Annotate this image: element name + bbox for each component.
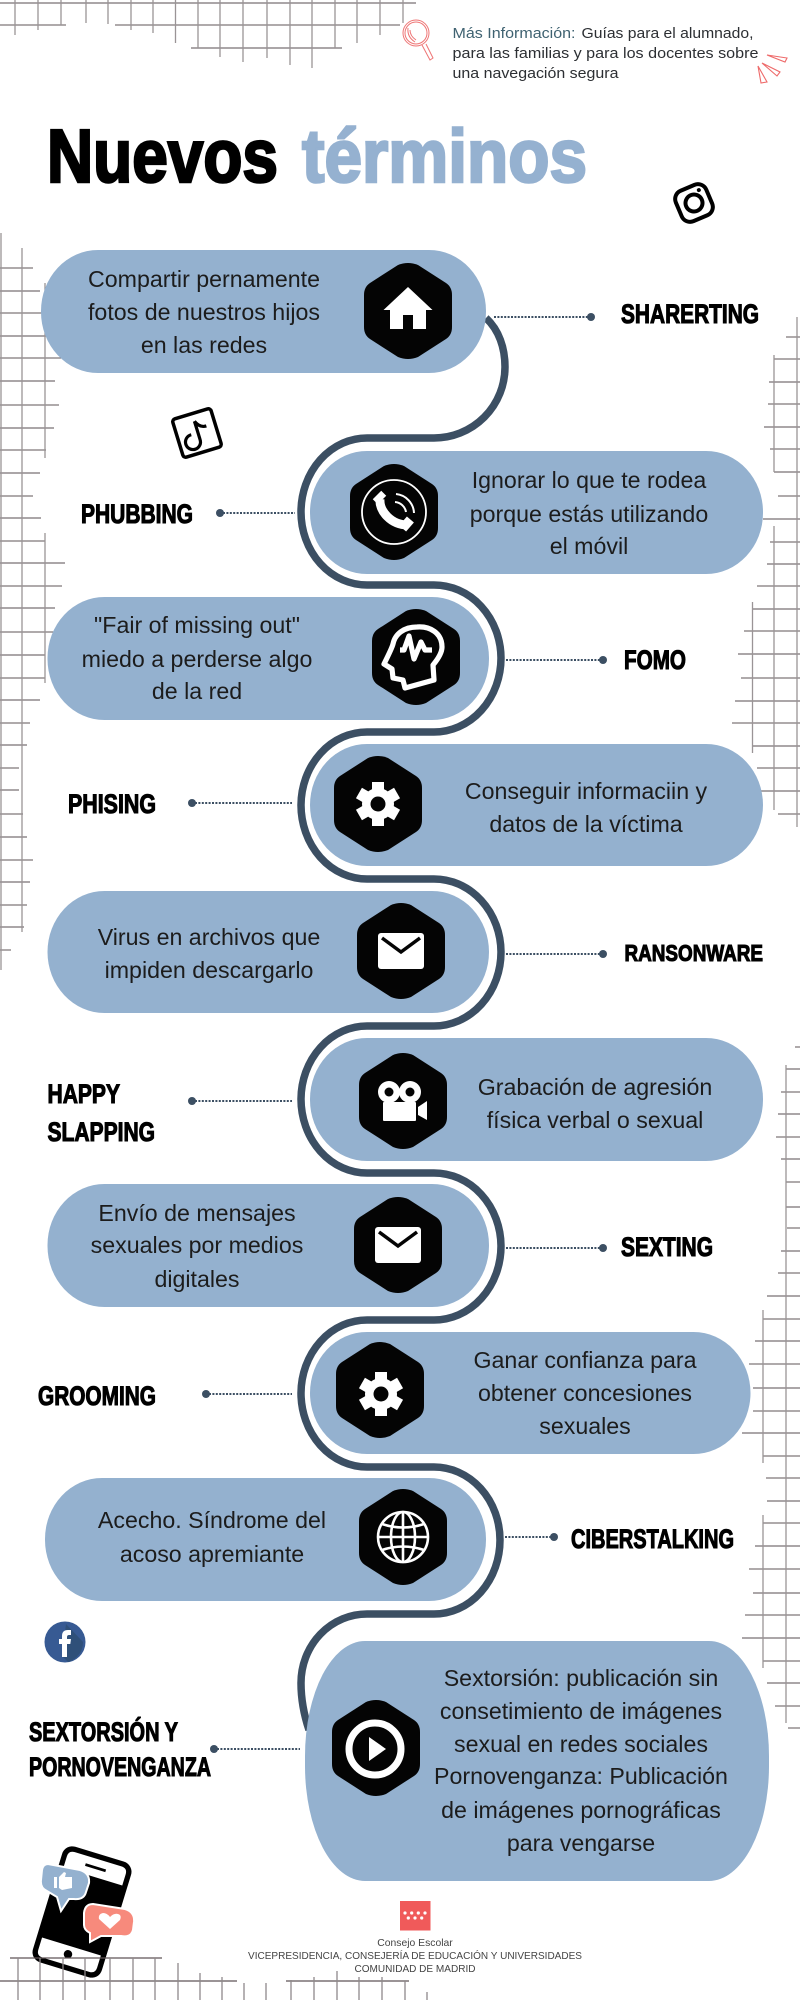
logo: comunidad de madrid xyxy=(400,1901,430,1930)
connector: phising xyxy=(188,799,292,807)
text: más información: para las familias y para los docentes sobre xyxy=(452,45,758,62)
connector: sexting xyxy=(506,1244,607,1252)
description: ransonware: impiden descargarlo xyxy=(105,957,313,983)
panel: fomo xyxy=(48,597,686,720)
icon: globe xyxy=(359,1489,447,1585)
icon: tiktok xyxy=(172,408,222,458)
description: phubbing: porque estás utilizando xyxy=(470,501,708,527)
description: happy slapping: Grabación de agresión xyxy=(478,1074,712,1100)
label: sexting: SEXTING xyxy=(621,1232,713,1262)
icon: phone call xyxy=(350,464,438,560)
title: términos xyxy=(302,114,587,198)
panel: happy slapping xyxy=(48,1038,763,1161)
label: sextorsión y pornovenganza xyxy=(29,1717,211,1782)
icon: play xyxy=(332,1700,420,1796)
text: más información: Guías para el alumnado, xyxy=(582,25,754,42)
description: fomo: de la red xyxy=(152,678,242,704)
label: grooming: GROOMING xyxy=(38,1381,156,1411)
description: sextorsión: Pornovenganza: Publicación xyxy=(434,1763,728,1789)
icon: video camera xyxy=(359,1053,447,1149)
description: ciberstalking xyxy=(98,1507,326,1567)
panel: sexting xyxy=(48,1184,713,1307)
connector: sextorsión xyxy=(210,1745,300,1753)
label: sextorsión y pornovenganza: PORNOVENGANZA xyxy=(29,1752,211,1782)
description: sextorsión: de imágenes pornográficas xyxy=(441,1797,721,1823)
description: phising: datos de la víctima xyxy=(489,811,683,837)
description: happy slapping xyxy=(478,1074,712,1133)
connector: happy slapping xyxy=(188,1097,292,1105)
description: sharerting: fotos de nuestros hijos xyxy=(88,299,320,325)
description: grooming: Ganar confianza para xyxy=(474,1347,697,1373)
description: sextorsión: consetimiento de imágenes xyxy=(440,1698,722,1724)
icon: envelope xyxy=(354,1197,442,1293)
icon: home xyxy=(364,263,452,359)
description: fomo: miedo a perderse algo xyxy=(82,646,312,672)
description: sexting: Envío de mensajes xyxy=(98,1200,296,1226)
text: más información xyxy=(452,25,758,82)
description: ransonware xyxy=(98,924,320,983)
icon: envelope xyxy=(357,903,445,999)
label: happy slapping: HAPPY xyxy=(48,1079,120,1109)
connector: ransonware xyxy=(506,950,607,958)
description: phubbing: Ignorar lo que te rodea xyxy=(472,467,706,493)
label: sharerting: SHARERTING xyxy=(621,299,759,329)
connector: ciberstalking xyxy=(505,1533,558,1541)
panel: phising xyxy=(68,744,763,866)
icon: instagram xyxy=(672,181,716,225)
footer text: COMUNIDAD DE MADRID xyxy=(354,1963,476,1975)
panel: ciberstalking xyxy=(45,1478,734,1601)
label: ciberstalking: CIBERSTALKING xyxy=(571,1524,734,1554)
label: phubbing: PHUBBING xyxy=(81,499,193,529)
description: sexting: digitales xyxy=(154,1266,240,1292)
title: Nuevos xyxy=(47,114,278,198)
label: sextorsión y pornovenganza: SEXTORSIÓN Y xyxy=(29,1717,178,1747)
description: ciberstalking: Acecho. Síndrome del xyxy=(98,1507,326,1533)
icon: phone with social reactions xyxy=(30,1844,134,1980)
description: sextorsión xyxy=(434,1665,728,1856)
icon: gear xyxy=(334,756,422,852)
description: phubbing: el móvil xyxy=(550,533,628,559)
icon: facebook xyxy=(44,1622,86,1662)
panel: sextorsión y pornovenganza xyxy=(29,1641,769,1881)
description: happy slapping: física verbal o sexual xyxy=(487,1107,703,1133)
title xyxy=(47,114,587,198)
description: sharerting xyxy=(88,266,320,358)
connector: sharerting xyxy=(494,313,595,321)
connector: phubbing xyxy=(216,509,295,517)
description: sextorsión: sexual en redes sociales xyxy=(454,1731,708,1757)
description: fomo: "Fair of missing out" xyxy=(94,612,300,638)
description: sexting: sexuales por medios xyxy=(91,1232,303,1258)
footer text xyxy=(248,1937,582,1975)
footer text: VICEPRESIDENCIA, CONSEJERÍA DE EDUCACIÓN Y UNIVERSIDADES xyxy=(248,1949,582,1962)
label: happy slapping: SLAPPING xyxy=(48,1117,155,1147)
description: ciberstalking: acoso apremiante xyxy=(120,1541,304,1567)
text: más información: una navegación segura xyxy=(452,65,619,82)
description: ransonware: Virus en archivos que xyxy=(98,924,320,950)
description: phubbing xyxy=(470,467,708,559)
text: más información: Más Información: xyxy=(452,25,576,42)
icon: magnifying glass xyxy=(403,20,433,60)
label: ransonware: RANSONWARE xyxy=(624,940,763,966)
connector: fomo xyxy=(506,656,607,664)
label: phising: PHISING xyxy=(68,789,156,819)
description: phising xyxy=(465,778,708,837)
description: grooming xyxy=(474,1347,697,1439)
description: fomo xyxy=(82,612,312,704)
label: fomo: FOMO xyxy=(624,645,686,675)
footer text: Consejo Escolar xyxy=(377,1937,453,1949)
serpentine path xyxy=(301,318,505,1730)
connector: grooming xyxy=(202,1390,292,1398)
description: sharerting: en las redes xyxy=(141,332,267,358)
description: sharerting: Compartir pernamente xyxy=(88,266,320,292)
icon: gear xyxy=(336,1342,424,1438)
panel: grooming xyxy=(38,1332,750,1454)
label: happy slapping xyxy=(48,1079,155,1147)
panel: sharerting xyxy=(41,250,759,373)
description: sexting xyxy=(91,1200,303,1292)
description: grooming: obtener concesiones xyxy=(478,1380,692,1406)
description: sextorsión: para vengarse xyxy=(507,1830,655,1856)
icon: head with brain waves xyxy=(372,609,460,705)
panel: ransonware xyxy=(48,891,763,1013)
panel: phubbing xyxy=(81,451,763,574)
description: grooming: sexuales xyxy=(539,1413,631,1439)
icon: sparkle accent xyxy=(758,55,787,83)
description: sextorsión: Sextorsión: publicación sin xyxy=(444,1665,718,1691)
description: phising: Conseguir informaciin y xyxy=(465,778,708,804)
